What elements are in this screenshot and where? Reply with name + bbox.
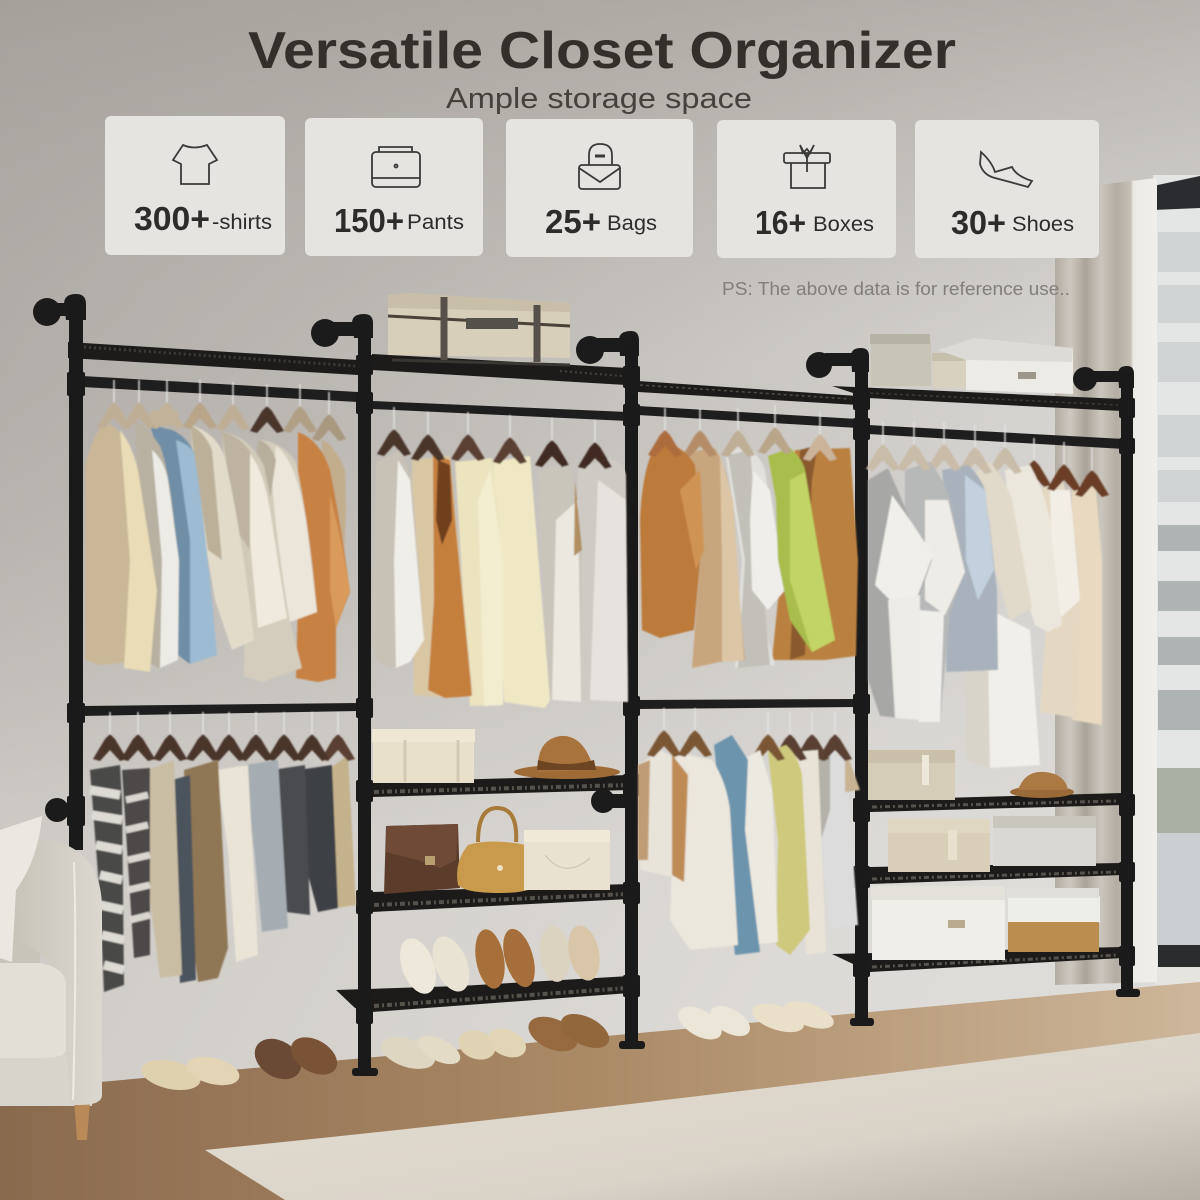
stat: 30+ shoes: 30+ (951, 204, 1006, 241)
clothes: lower left section (90, 712, 356, 992)
white (216, 765, 258, 962)
white long (742, 750, 778, 945)
grey shirt (905, 462, 965, 722)
cream shirt (244, 440, 317, 682)
light grey dress (812, 748, 858, 928)
blue (714, 735, 760, 955)
title: Versatile Closet Organizer (248, 22, 956, 80)
beige shirt (968, 462, 1032, 620)
stat: 300+ t-shirts: -shirts (212, 211, 272, 234)
stat: 150+ pants: Pants (407, 211, 464, 234)
white shirt (135, 420, 178, 668)
card: boxes (717, 120, 896, 258)
boxes on top right shelf (870, 334, 1073, 394)
butter dress (493, 456, 550, 708)
stat: 300+ t-shirts: 300+ (134, 200, 210, 237)
blue shirt (150, 425, 216, 664)
long white dress (966, 600, 1040, 768)
lower shelves (336, 775, 1122, 1012)
storage boxes and hat on right shelves (868, 750, 1100, 960)
white dress right (578, 458, 628, 702)
blue grey (244, 760, 288, 932)
stat: 30+ shoes (951, 204, 1074, 241)
stat: 25+ bags: Bags (607, 212, 657, 235)
stat: 150+ pants: 150+ (334, 202, 404, 239)
blue-grey shirt (942, 465, 998, 672)
white blouse (670, 752, 738, 950)
clothes: upper right section (866, 422, 1109, 768)
caramel cardigan (772, 448, 858, 660)
cream dress (455, 458, 503, 706)
beige long sleeve (85, 422, 136, 665)
icon: high heel shoe (980, 152, 1032, 187)
white shirt (725, 445, 782, 668)
rug (205, 1033, 1200, 1200)
window with city view (1153, 175, 1200, 985)
shoes on lower shelf (393, 922, 604, 999)
beige shirt (190, 425, 254, 650)
orange shirt (296, 432, 350, 682)
card: pants (305, 118, 483, 256)
stripes (90, 765, 124, 992)
ivory shirt (222, 432, 287, 628)
grey white dress (538, 462, 582, 702)
charcoal (298, 765, 338, 912)
curtain (1055, 178, 1157, 985)
cream (1040, 476, 1080, 718)
tan dress (690, 448, 745, 668)
storage box and hat on middle shelf (372, 729, 620, 783)
icon: t-shirt (173, 145, 217, 184)
vertical posts (67, 300, 1140, 1076)
stat: 300+ t-shirts (134, 200, 272, 237)
stat: 150+ pants (334, 202, 464, 239)
beige (794, 750, 826, 955)
stat: 30+ shoes: Shoes (1012, 213, 1074, 236)
stat: 25+ bags (545, 203, 657, 240)
icon: gift box (784, 145, 830, 188)
clothing rack frame (33, 294, 1140, 1076)
grey white sleeve shirt (868, 468, 932, 720)
stat: 16+ boxes: Boxes (813, 213, 874, 236)
card: bags (506, 119, 693, 257)
orange dress (640, 444, 703, 638)
clothes: upper left section (85, 380, 350, 682)
beige right (1070, 478, 1102, 725)
stat: 16+ boxes: 16+ (755, 204, 806, 241)
green sweater (768, 448, 835, 652)
dark stripes (122, 768, 150, 958)
wall flanges and elbows (33, 294, 1134, 822)
white + tan (638, 750, 690, 880)
yellow (768, 745, 810, 955)
handbags and box on middle shelf (384, 808, 610, 894)
orange tank (412, 456, 472, 698)
icon: pants case (372, 147, 420, 187)
shoes on the floor (139, 996, 837, 1095)
icon: bag (579, 144, 620, 189)
white blouse (372, 450, 424, 668)
armchair (0, 816, 102, 1140)
white shirt (1005, 465, 1062, 632)
beige grey (148, 760, 182, 978)
stat: 16+ boxes (755, 204, 874, 241)
clothes: upper middle section (372, 407, 628, 708)
clothes: upper centre-right section (640, 405, 858, 668)
footnote: PS: The above data is for reference use.. (722, 279, 1070, 299)
tan garment right (328, 755, 356, 908)
olive (184, 760, 228, 982)
stat: 25+ bags: 25+ (545, 203, 601, 240)
card: t-shirts (105, 116, 285, 255)
top shelves (68, 342, 1122, 411)
suitcase on top shelf (388, 293, 570, 365)
card: shoes (915, 120, 1099, 258)
hanging rods (82, 376, 1124, 716)
clothes: lower right section (638, 708, 860, 955)
wooden floor (0, 982, 1200, 1200)
subtitle: Ample storage space (446, 83, 752, 115)
dark blue (172, 775, 196, 983)
